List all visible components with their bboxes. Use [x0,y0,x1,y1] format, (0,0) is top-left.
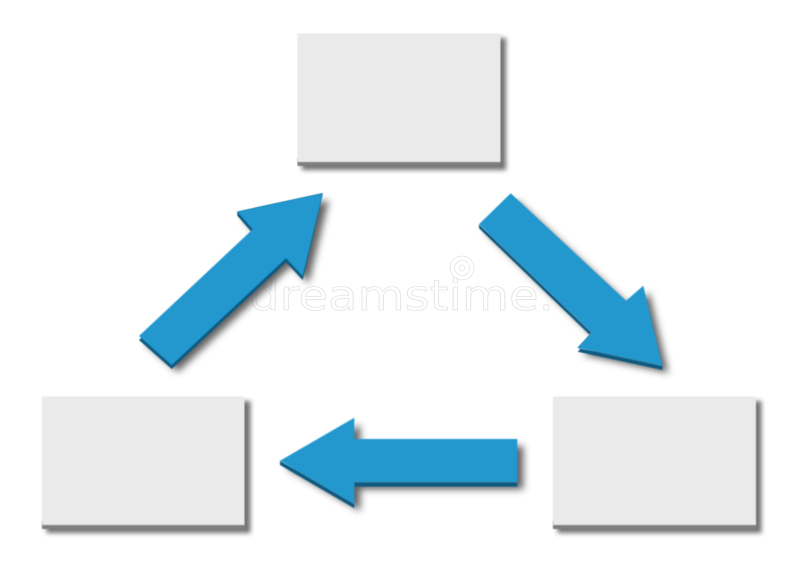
box: top [298,34,506,170]
watermark: dreamstime. [249,271,554,320]
arrow: top box to bottom right box [479,193,668,373]
arrow: bottom right box to bottom left box [280,418,523,511]
box: bottom right [553,396,762,533]
watermark [249,256,554,320]
arrow: bottom left box to top box [139,193,329,372]
box: bottom left [42,396,250,533]
